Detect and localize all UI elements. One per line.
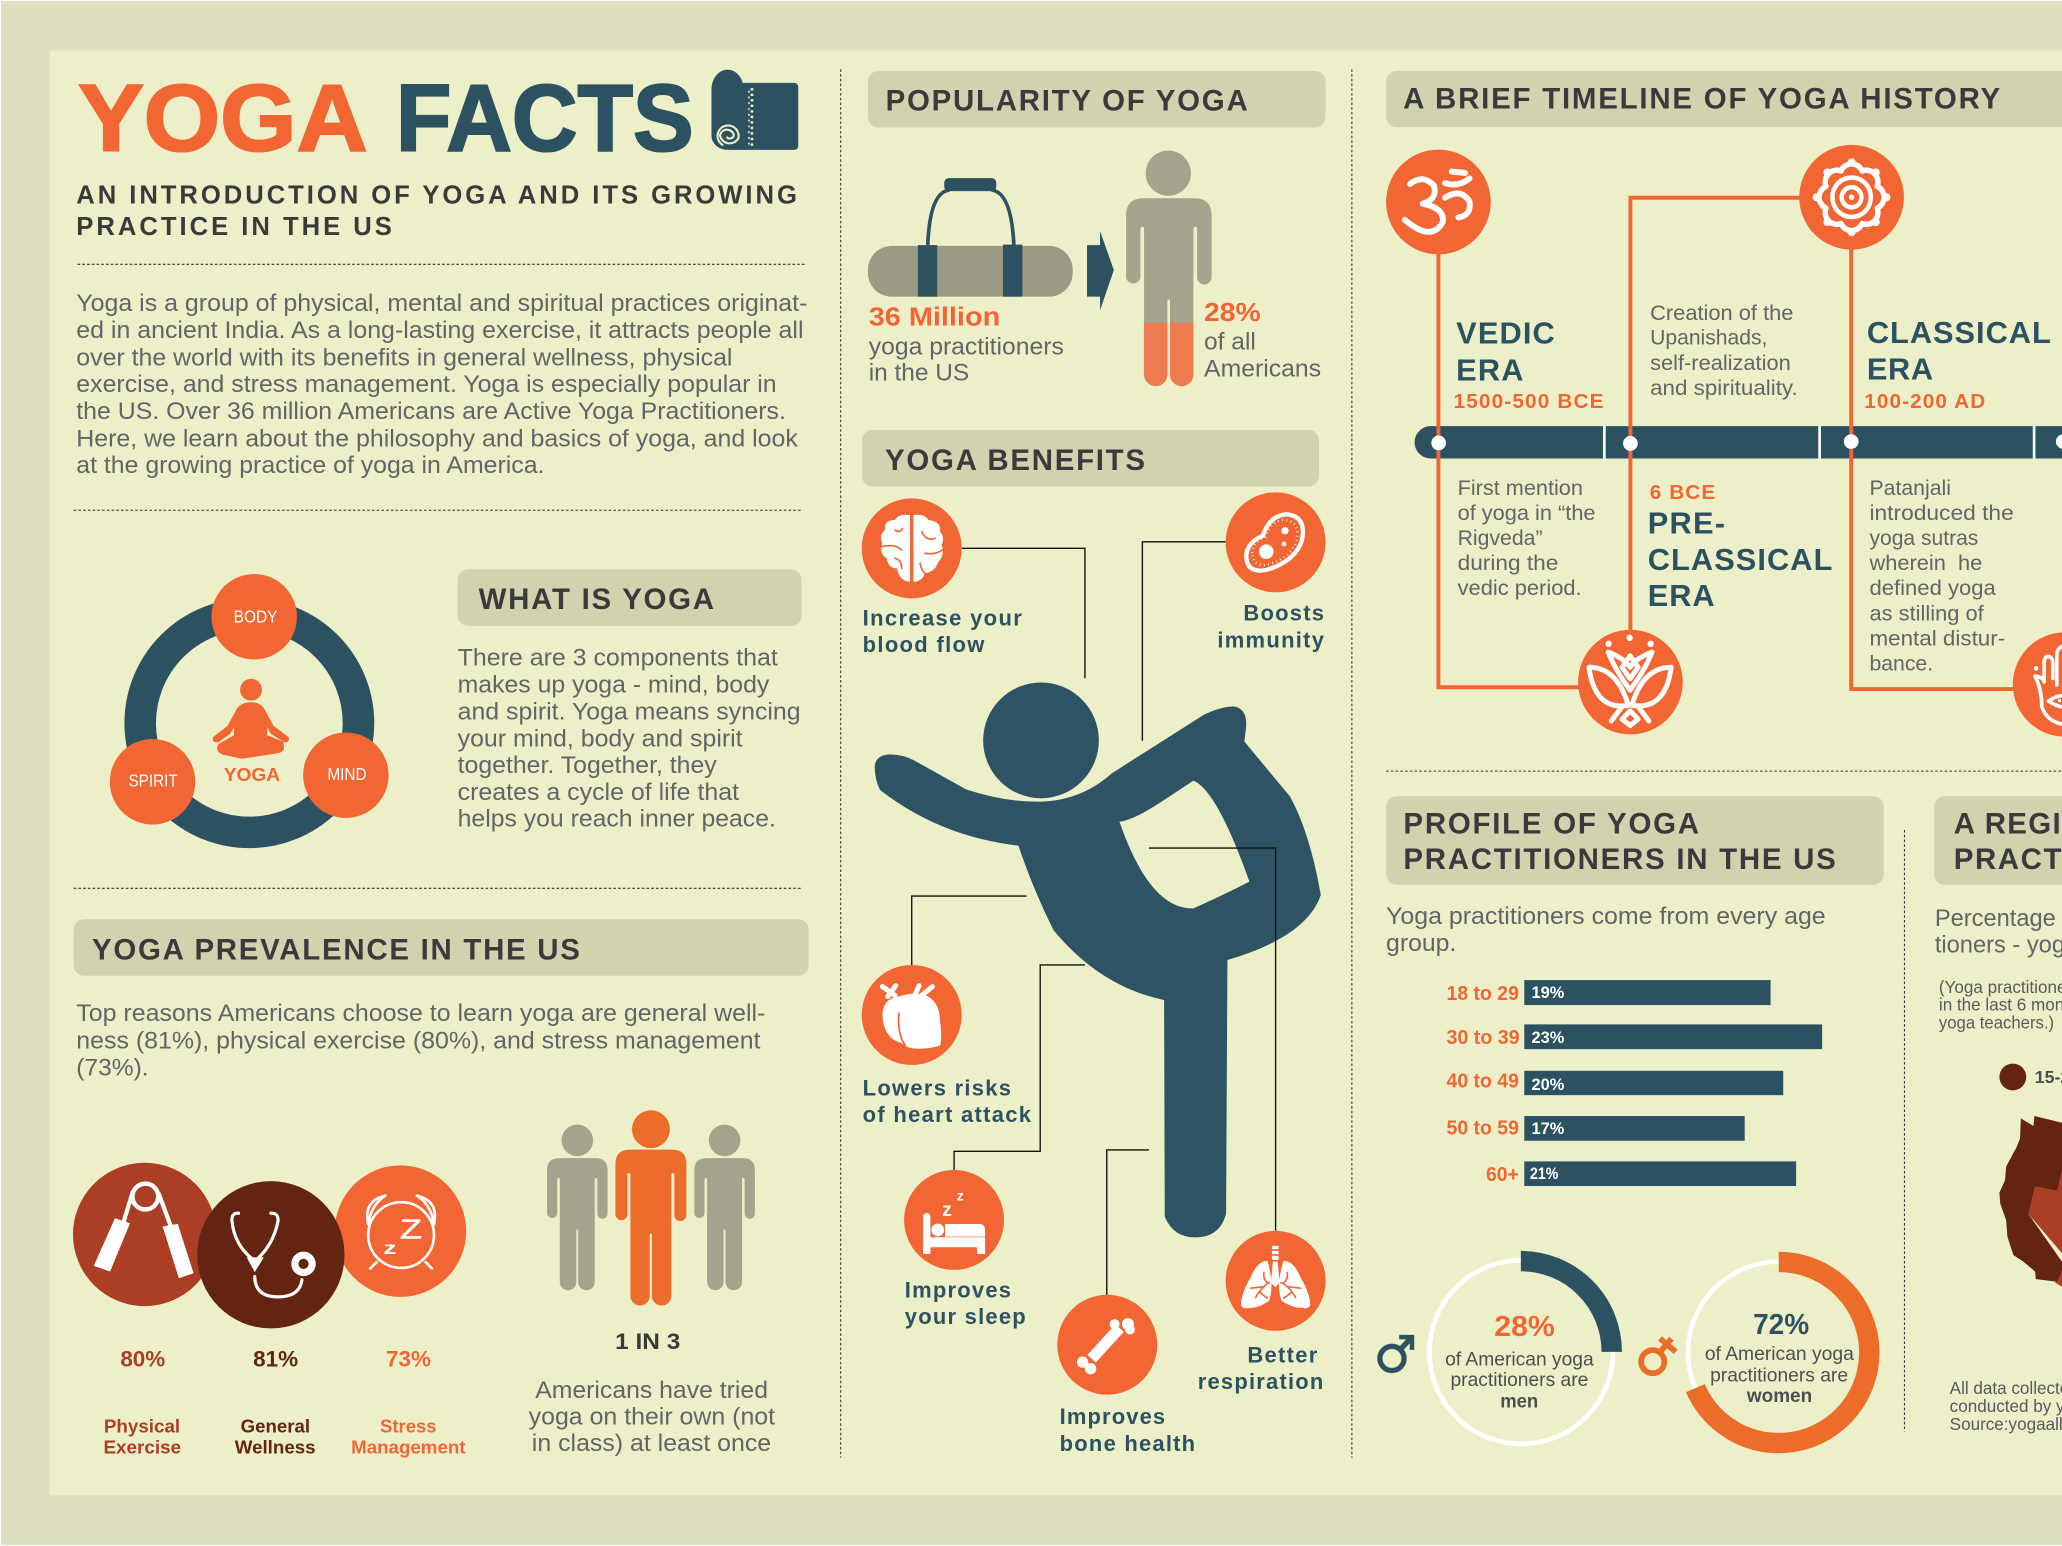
stat: 36 million: 36 Million <box>869 304 1000 332</box>
icon: clock with sleep symbol: z <box>383 1239 396 1258</box>
stat: general wellness: Wellness <box>235 1436 316 1457</box>
stat: 36 million <box>869 304 1064 387</box>
icon: bed: z <box>942 1200 952 1221</box>
text block: one in three caption <box>529 1378 776 1457</box>
stat: 36 million: yoga practitioners <box>869 334 1064 360</box>
icon: cell <box>1226 492 1326 592</box>
panel: regional heading (cropped): A REGI <box>1954 807 2062 840</box>
text block: regional intro (cropped) <box>1935 906 2062 959</box>
benefit: blood flow: blood flow <box>863 632 985 657</box>
panel: yoga benefits heading: YOGA BENEFITS <box>885 444 1145 477</box>
connector lines <box>1438 198 2019 689</box>
panel: regional heading (cropped): PRACT <box>1954 843 2062 876</box>
stat: 28 percent: 28% <box>1204 299 1261 327</box>
benefit: bone: Improves <box>1060 1404 1165 1429</box>
stat: stress management: Management <box>351 1436 466 1457</box>
icon: bed: z <box>957 1188 964 1204</box>
text block: what is yoga: helps you reach inner peace. <box>458 807 776 833</box>
text block: what is yoga <box>458 645 801 833</box>
text block: classical era description: wherein he <box>1868 550 1982 575</box>
chart: timeline of yoga history <box>1386 145 2062 737</box>
text block: introduction: at the growing practice of yoga in America. <box>76 453 544 479</box>
icon: clock with sleep symbol: Z <box>400 1213 422 1244</box>
text block: what is yoga: makes up yoga - mind, body <box>458 673 769 699</box>
node: spirit: SPIRIT <box>128 771 178 790</box>
title: YOGA <box>78 65 368 171</box>
text block: pre-classical description: and spirituality. <box>1650 375 1798 400</box>
bar: 60+ <box>1486 1161 1796 1186</box>
diagram: body, mind and spirit cycle <box>110 574 389 832</box>
stat: 28 percent <box>1204 299 1321 383</box>
bar: 60+: 21% <box>1530 1165 1559 1183</box>
era: vedic <box>1454 316 1604 413</box>
donut: women 72 percent: women <box>1746 1385 1812 1407</box>
icon: hamsa hand <box>2013 632 2062 737</box>
text block: classical era description: yoga sutras <box>1869 525 1979 550</box>
stat: physical exercise: Physical <box>104 1415 180 1436</box>
stat: physical exercise: 80% <box>120 1347 165 1372</box>
era: classical: CLASSICAL <box>1867 315 2051 350</box>
node: mind: MIND <box>327 765 367 784</box>
era: pre-classical: 6 BCE <box>1650 481 1715 504</box>
text block: prevalence: ness (81%), physical exercise (80%), and stress management <box>76 1029 761 1055</box>
benefit: respiration <box>1198 1231 1326 1394</box>
donut: men 28 percent <box>1429 1260 1613 1444</box>
bar: 18 to 29 <box>1447 980 1771 1005</box>
icon: female symbol <box>1641 1338 1676 1373</box>
benefit: heart <box>862 965 1032 1127</box>
text block: classical era description: bance. <box>1869 651 1933 676</box>
bar: 30 to 39 <box>1447 1024 1822 1049</box>
donut: men 28 percent: men <box>1500 1390 1538 1412</box>
era: vedic: VEDIC <box>1456 316 1555 351</box>
benefit: sleep: your sleep <box>905 1304 1026 1329</box>
arrow <box>1087 231 1114 310</box>
benefit: bone: bone health <box>1060 1431 1195 1456</box>
icon: meditating figure <box>213 679 289 759</box>
panel: popularity heading: POPULARITY OF YOGA <box>886 85 1248 118</box>
text block: pre-classical description: self-realization <box>1650 350 1791 375</box>
icon: rolled yoga mat <box>711 70 798 150</box>
text block: what is yoga: There are 3 components that <box>458 645 778 671</box>
stat: stress management: Stress <box>380 1415 437 1436</box>
bar: 18 to 29: 19% <box>1532 984 1565 1002</box>
benefit: immunity: Boosts <box>1243 601 1324 626</box>
text block: what is yoga: and spirit. Yoga means syncing <box>458 700 801 726</box>
panel: yoga benefits heading <box>862 430 1319 487</box>
legend: map range <box>1999 1064 2062 1090</box>
panel: popularity heading <box>868 71 1326 128</box>
title <box>78 65 694 171</box>
benefit: respiration: respiration <box>1198 1369 1323 1394</box>
text block: classical era description <box>1868 475 2014 676</box>
bar: 18 to 29: 18 to 29 <box>1447 983 1519 1005</box>
bar: 40 to 49: 20% <box>1532 1076 1565 1094</box>
text block: classical era description: mental distur- <box>1869 625 2005 650</box>
text block: one in three caption: yoga on their own (not <box>529 1405 776 1431</box>
donut: men 28 percent: 28% <box>1494 1311 1555 1343</box>
donut: men 28 percent: practitioners are <box>1451 1369 1588 1391</box>
bar: 50 to 59 <box>1447 1116 1745 1141</box>
icon: male symbol <box>1380 1337 1412 1371</box>
bar chart: age groups <box>1447 980 1822 1186</box>
figure: dancer pose silhouette <box>875 682 1321 1237</box>
icon: stethoscope <box>197 1181 345 1328</box>
text block: introduction: Yoga is a group of physical, mental and spiritual practices originat- <box>76 291 807 317</box>
text block: introduction: the US. Over 36 million Americans are Active Yoga Practitioners. <box>76 399 786 425</box>
icon: bed <box>904 1170 1004 1270</box>
benefit: blood flow <box>862 498 1022 657</box>
label: yoga: YOGA <box>224 764 280 785</box>
bar: 60+: 60+ <box>1486 1164 1519 1186</box>
text block: introduction: over the world with its benefits in general wellness, physical <box>76 345 732 371</box>
benefit: immunity: immunity <box>1217 628 1325 653</box>
era: vedic: ERA <box>1456 353 1523 388</box>
era: pre-classical: CLASSICAL <box>1648 542 1832 577</box>
text block: prevalence: (73%). <box>76 1056 149 1082</box>
icon: lotus <box>1578 630 1683 734</box>
text block: regional note (cropped): yoga teachers.) <box>1939 1014 2054 1033</box>
panel: timeline heading <box>1386 71 2062 127</box>
panel: what is yoga heading <box>458 569 802 626</box>
icon: yoga mat bag <box>868 178 1073 297</box>
panel: timeline heading: A BRIEF TIMELINE OF YOGA HISTORY <box>1403 82 2001 115</box>
text block: profile intro: Yoga practitioners come from every age <box>1386 904 1826 930</box>
node: body: BODY <box>234 607 278 626</box>
icon: hand gripper <box>73 1163 216 1306</box>
text block: prevalence: Top reasons Americans choose to learn yoga are general well- <box>76 1001 765 1027</box>
icon: clock with sleep symbol <box>335 1165 466 1297</box>
map: west coast states (cropped) <box>1999 1116 2062 1287</box>
icon: bone <box>1057 1295 1157 1395</box>
panel: yoga prevalence heading: YOGA PREVALENCE IN THE US <box>92 933 580 966</box>
stat: 36 million: in the US <box>869 361 969 387</box>
stat: general wellness: 81% <box>253 1347 298 1372</box>
benefit: heart: of heart attack <box>863 1102 1032 1127</box>
text block: one in three caption: in class) at least once <box>532 1431 771 1457</box>
era: pre-classical <box>1648 481 1832 613</box>
text block: pre-classical description <box>1650 300 1798 400</box>
text block: introduction: ed in ancient India. As a long-lasting exercise, it attracts people all <box>76 318 803 344</box>
text block: profile intro: group. <box>1386 931 1456 957</box>
donut: women 72 percent: practitioners are <box>1710 1364 1848 1386</box>
node: body <box>211 574 297 659</box>
text block: profile intro <box>1386 904 1826 957</box>
text block: regional note (cropped): in the last 6 mon <box>1939 995 2062 1014</box>
icon: brain <box>862 498 962 598</box>
node: spirit <box>110 739 195 825</box>
stat: physical exercise: Exercise <box>103 1436 181 1457</box>
text block: classical era description: Patanjali <box>1869 475 1951 500</box>
text block: source note (cropped): conducted by y <box>1950 1397 2062 1416</box>
panel: profile heading: PRACTITIONERS IN THE US <box>1403 843 1836 876</box>
text block: pre-classical description: Creation of the <box>1650 300 1793 325</box>
icon: lungs <box>1226 1231 1326 1331</box>
benefit: respiration: Better <box>1247 1342 1318 1367</box>
text block: regional note (cropped) <box>1939 978 2062 1033</box>
benefit: sleep: Improves <box>905 1278 1011 1303</box>
text block: introduction: Here, we learn about the philosophy and basics of yoga, and look <box>76 426 798 452</box>
stat: stress management <box>351 1347 466 1457</box>
era: classical <box>1864 315 2051 413</box>
text block: classical era description: defined yoga <box>1869 575 1997 600</box>
era: classical: ERA <box>1867 352 1933 387</box>
text block: what is yoga: creates a cycle of life that <box>458 780 740 806</box>
bar: 30 to 39: 30 to 39 <box>1447 1027 1520 1049</box>
subtitle: AN INTRODUCTION OF YOGA AND ITS GROWING <box>76 181 797 209</box>
stat: general wellness <box>235 1347 316 1457</box>
donut: women 72 percent: of American yoga <box>1705 1343 1854 1365</box>
text block: vedic era description <box>1458 475 1596 600</box>
text block: source note (cropped) <box>1950 1379 2062 1434</box>
bar: 40 to 49 <box>1447 1071 1783 1095</box>
text block: pre-classical description: Upanishads, <box>1650 325 1767 350</box>
icon: person with 28 percent filled <box>1126 151 1212 386</box>
text block: classical era description: as stilling of <box>1869 601 1985 626</box>
bar: 40 to 49: 40 to 49 <box>1447 1071 1519 1093</box>
timeline markers <box>1431 434 2062 451</box>
text block: vedic era description: First mention <box>1458 475 1583 500</box>
era: classical: 100-200 AD <box>1864 390 1985 413</box>
stat: stress management: 73% <box>386 1347 431 1372</box>
benefit: blood flow: Increase your <box>863 606 1022 631</box>
panel: regional heading (cropped) <box>1934 796 2062 885</box>
panel: profile heading: PROFILE OF YOGA <box>1403 807 1699 840</box>
text block: regional intro (cropped): Percentage <box>1935 906 2056 932</box>
text block: what is yoga: your mind, body and spirit <box>458 727 743 753</box>
text block: one in three caption: Americans have tried <box>535 1378 768 1404</box>
era: pre-classical: PRE- <box>1648 505 1725 540</box>
era: vedic: 1500-500 BCE <box>1454 390 1604 413</box>
icon: three people, one in three <box>547 1110 755 1306</box>
stat: 28 percent: Americans <box>1204 357 1321 383</box>
subtitle <box>76 181 797 241</box>
text block: vedic era description: Rigveda” <box>1458 525 1543 550</box>
connector lines: benefits to body <box>912 542 1276 1295</box>
stat: physical exercise <box>103 1347 181 1457</box>
benefit: heart: Lowers risks <box>863 1076 1011 1101</box>
stat: general wellness: General <box>241 1415 310 1436</box>
panel: what is yoga heading: WHAT IS YOGA <box>479 583 714 616</box>
text block: vedic era description: vedic period. <box>1458 575 1582 600</box>
text block: classical era description: introduced the <box>1869 500 2014 525</box>
icon: heart <box>862 965 962 1065</box>
donut: men 28 percent: of American yoga <box>1445 1348 1594 1370</box>
bar: 50 to 59: 17% <box>1532 1120 1565 1138</box>
text block: introduction <box>76 291 807 479</box>
stat: 28 percent: of all <box>1204 329 1256 355</box>
text block: vedic era description: during the <box>1458 550 1558 575</box>
panel: profile heading <box>1386 796 1884 885</box>
text block: prevalence <box>76 1001 765 1082</box>
text block: introduction: exercise, and stress management. Yoga is especially popular in <box>76 372 777 398</box>
title: FACTS <box>396 65 694 171</box>
benefit: immunity <box>1217 492 1326 653</box>
era: pre-classical: ERA <box>1648 578 1715 613</box>
timeline bar <box>1415 426 2062 459</box>
panel: yoga prevalence heading <box>74 919 809 976</box>
donut: women 72 percent: 72% <box>1753 1309 1809 1341</box>
subtitle: PRACTICE IN THE US <box>76 213 392 241</box>
text block: vedic era description: of yoga in “the <box>1458 500 1596 525</box>
bar: 50 to 59: 50 to 59 <box>1447 1117 1519 1139</box>
benefit: sleep <box>904 1170 1026 1329</box>
icon: mandala wheel <box>1799 145 1904 250</box>
benefit: bone <box>1057 1295 1195 1456</box>
icon: om symbol <box>1386 150 1491 254</box>
node: mind <box>303 732 389 818</box>
text block: what is yoga: together. Together, they <box>458 753 717 779</box>
bar: 30 to 39: 23% <box>1532 1029 1565 1047</box>
donut: women 72 percent <box>1688 1262 1869 1443</box>
chart: reasons for practising yoga <box>73 1163 466 1457</box>
text block: regional intro (cropped): tioners - yog <box>1935 933 2062 959</box>
stat: one in three: 1 IN 3 <box>615 1329 680 1354</box>
